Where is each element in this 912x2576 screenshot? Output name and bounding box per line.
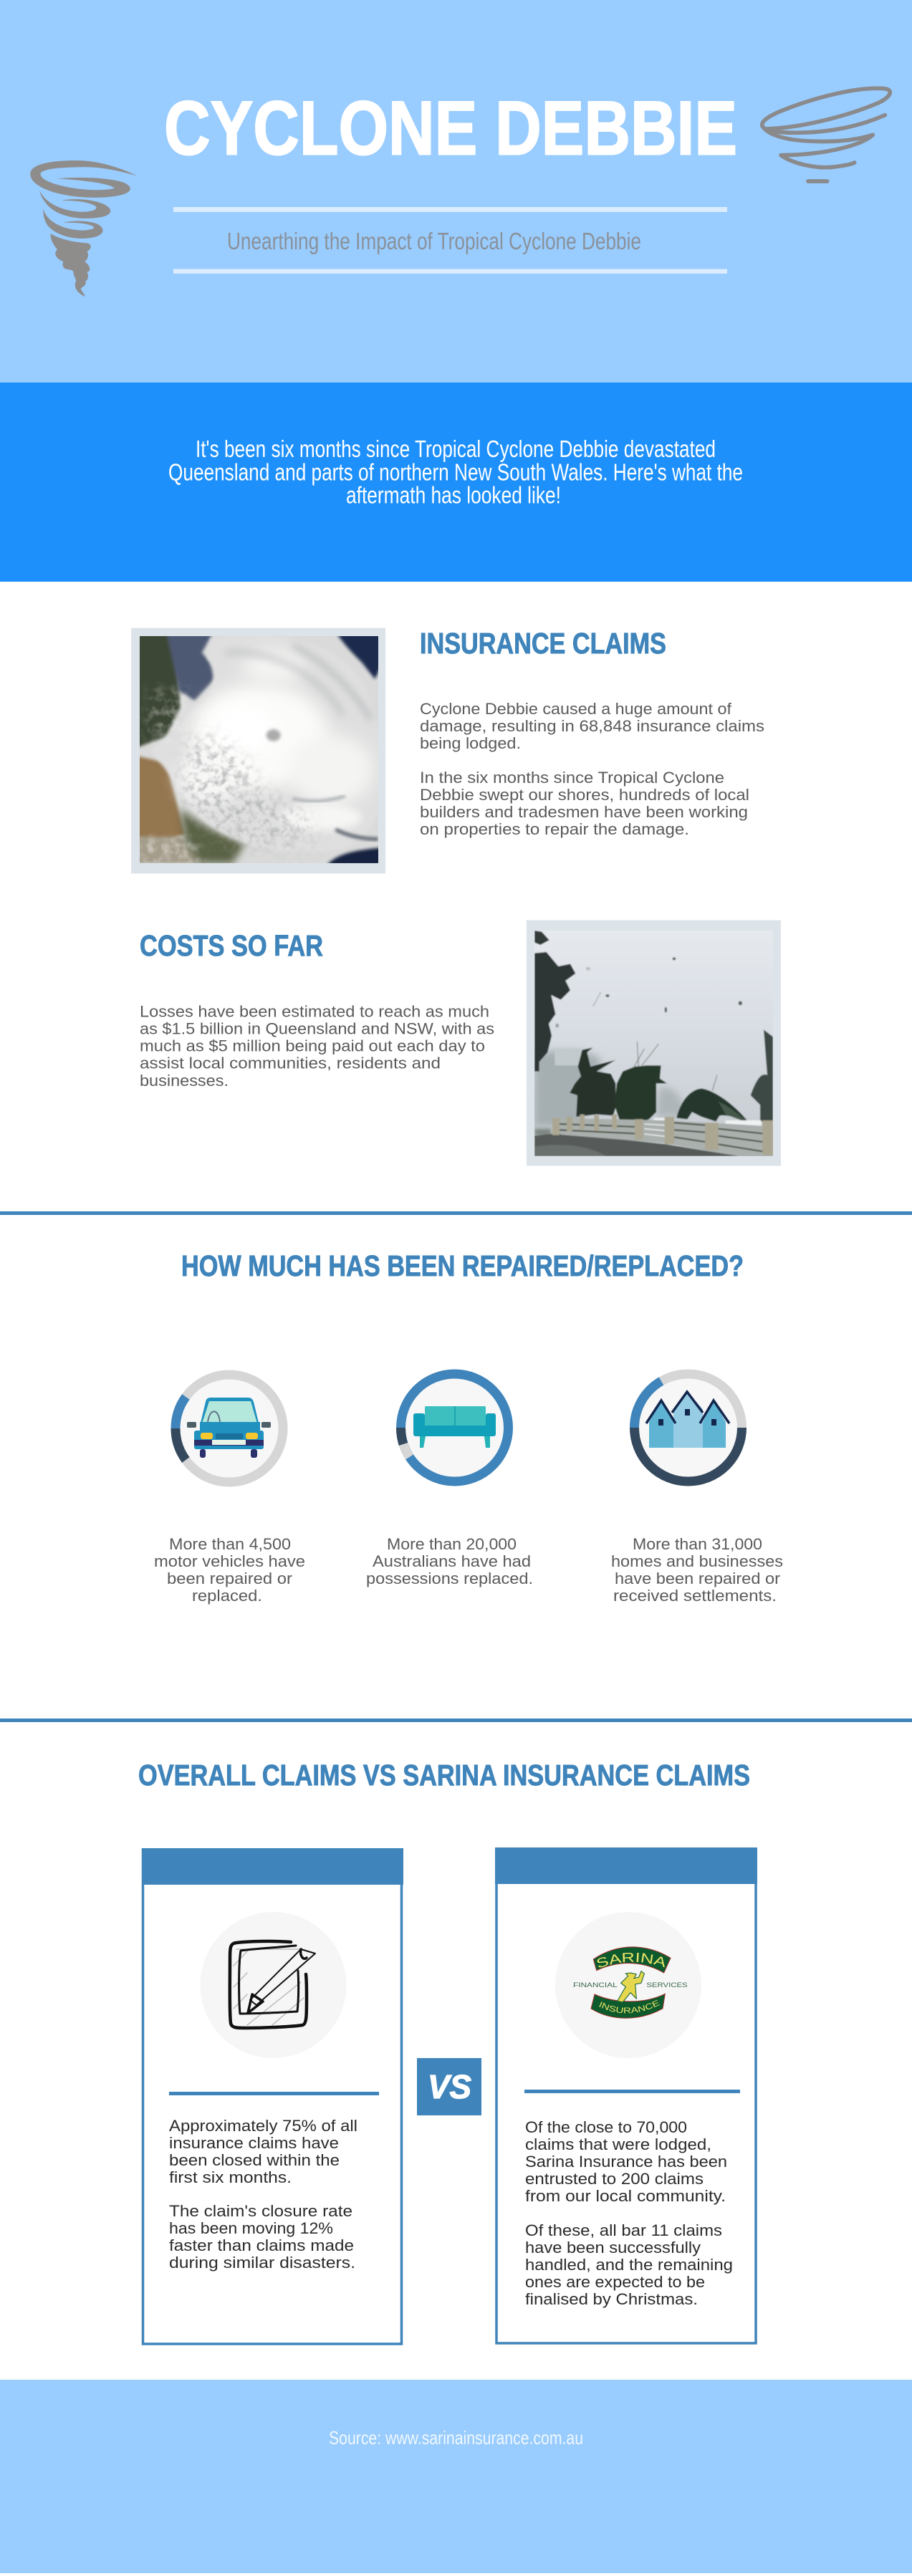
icon: Sarina logo: FINANCIAL <box>573 1981 618 1989</box>
chart: houses ring <box>630 1370 747 1486</box>
icon: sofa <box>413 1406 496 1448</box>
icon: right tornado <box>762 88 890 181</box>
text: costs body: assist local communities, residents and <box>140 1054 441 1072</box>
text: possessions stat: Australians have had <box>373 1552 531 1570</box>
text: insurance claims body <box>420 700 764 838</box>
text: costs body: much as $5 million being paid out each day to <box>140 1037 485 1054</box>
chart: sofa ring <box>397 1370 513 1486</box>
intro band: Queensland and parts of northern New South Wales. Here's what the <box>168 458 743 486</box>
text: costs body: Losses have been estimated to reach as much <box>140 1003 489 1020</box>
icon: Sarina logo: SERVICES <box>646 1981 688 1989</box>
divider <box>0 1211 912 1215</box>
text: costs body <box>140 1003 494 1090</box>
icon: car <box>187 1398 271 1458</box>
panel: sarina claims card <box>495 1847 757 2345</box>
text: possessions stat: possessions replaced. <box>366 1570 533 1587</box>
text: sarina claims body: ones are expected to be <box>525 2273 705 2291</box>
icon: Sarina logo: SARINA <box>597 1953 665 1967</box>
text: overall claims body <box>169 2117 357 2272</box>
text: sarina claims body: Of these, all bar 11 claims <box>525 2221 722 2239</box>
icon: pen and paper <box>230 1941 315 2028</box>
badge: VS <box>417 2058 481 2115</box>
text: insurance claims body: on properties to repair the damage. <box>420 820 689 838</box>
text: vehicles stat <box>154 1535 305 1605</box>
text: sarina claims body: finalised by Christmas. <box>525 2290 698 2308</box>
heading: repaired: HOW MUCH HAS BEEN REPAIRED/REPLACED? <box>181 1249 744 1282</box>
text: insurance claims body: being lodged. <box>420 734 521 752</box>
text: overall claims body: The claim's closure rate <box>169 2202 352 2220</box>
text: vehicles stat: been repaired or <box>167 1570 292 1587</box>
text: homes stat: homes and businesses <box>611 1552 783 1570</box>
text: vehicles stat: More than 4,500 <box>169 1535 291 1553</box>
footer band <box>0 2380 912 2573</box>
text: homes stat: have been repaired or <box>615 1570 780 1587</box>
icon: left tornado <box>30 160 138 297</box>
text: sarina claims body: entrusted to 200 claims <box>525 2170 704 2188</box>
chart: car ring <box>171 1370 287 1486</box>
text: sarina claims body <box>525 2118 733 2308</box>
heading: costs so far: COSTS SO FAR <box>140 929 323 962</box>
heading: insurance claims: INSURANCE CLAIMS <box>420 627 666 660</box>
text: overall claims body: insurance claims have <box>169 2134 339 2152</box>
text: overall claims body: faster than claims made <box>169 2236 354 2254</box>
text: overall claims body: first six months. <box>169 2168 292 2186</box>
text: sarina claims body: handled, and the remaining <box>525 2256 733 2274</box>
subtitle divider top <box>173 207 727 212</box>
text: sarina claims body: have been successfully <box>525 2239 701 2257</box>
heading: overall claims: OVERALL CLAIMS VS SARINA INSURANCE CLAIMS <box>138 1759 750 1792</box>
text: possessions stat: More than 20,000 <box>387 1535 517 1553</box>
icon: Sarina logo <box>573 1946 688 2019</box>
text: overall claims body: Approximately 75% of all <box>169 2117 357 2135</box>
text: costs body: as $1.5 billion in Queensland and NSW, with as <box>140 1020 494 1037</box>
panel: satellite photo <box>131 628 385 874</box>
divider <box>0 1719 912 1722</box>
text: sarina claims body: Sarina Insurance has been <box>525 2153 727 2171</box>
text: sarina claims body: claims that were lodged, <box>525 2135 711 2153</box>
text: overall claims body: has been moving 12% <box>169 2219 333 2237</box>
text: insurance claims body: damage, resulting in 68,848 insurance claims <box>420 717 764 735</box>
text: vehicles stat: motor vehicles have <box>154 1552 305 1570</box>
icon: houses <box>646 1392 729 1448</box>
title: CYCLONE DEBBIE <box>164 85 737 170</box>
text: vehicles stat: replaced. <box>192 1587 262 1605</box>
intro band: aftermath has looked like! <box>346 481 561 509</box>
text: homes stat: More than 31,000 <box>633 1535 762 1553</box>
text: costs body: businesses. <box>140 1072 229 1090</box>
text: insurance claims body: Cyclone Debbie caused a huge amount of <box>420 700 732 718</box>
badge: VS: VS <box>428 2068 471 2105</box>
panel: overall claims card <box>142 1848 403 2344</box>
icon: Sarina logo: INSURANCE <box>599 2000 660 2013</box>
text: insurance claims body: In the six months since Tropical Cyclone <box>420 769 724 787</box>
subtitle divider bottom <box>173 269 727 274</box>
header band <box>0 0 912 383</box>
footer band: Source: www.sarinainsurance.com.au <box>329 2427 583 2448</box>
panel: storm photo <box>527 920 781 1166</box>
text: sarina claims body: Of the close to 70,000 <box>525 2118 687 2136</box>
text: overall claims body: during similar disasters. <box>169 2254 355 2272</box>
subtitle: Unearthing the Impact of Tropical Cyclone Debbie <box>227 228 641 254</box>
text: insurance claims body: builders and tradesmen have been working <box>420 803 748 821</box>
text: homes stat: received settlements. <box>613 1587 777 1605</box>
intro band: It's been six months since Tropical Cyclone Debbie devastated <box>196 436 716 462</box>
text: overall claims body: been closed within the <box>169 2151 340 2169</box>
text: sarina claims body: from our local community. <box>525 2187 726 2205</box>
intro band <box>0 383 912 582</box>
text: insurance claims body: Debbie swept our shores, hundreds of local <box>420 786 749 804</box>
text: possessions stat <box>366 1535 533 1587</box>
text: homes stat <box>611 1535 783 1605</box>
